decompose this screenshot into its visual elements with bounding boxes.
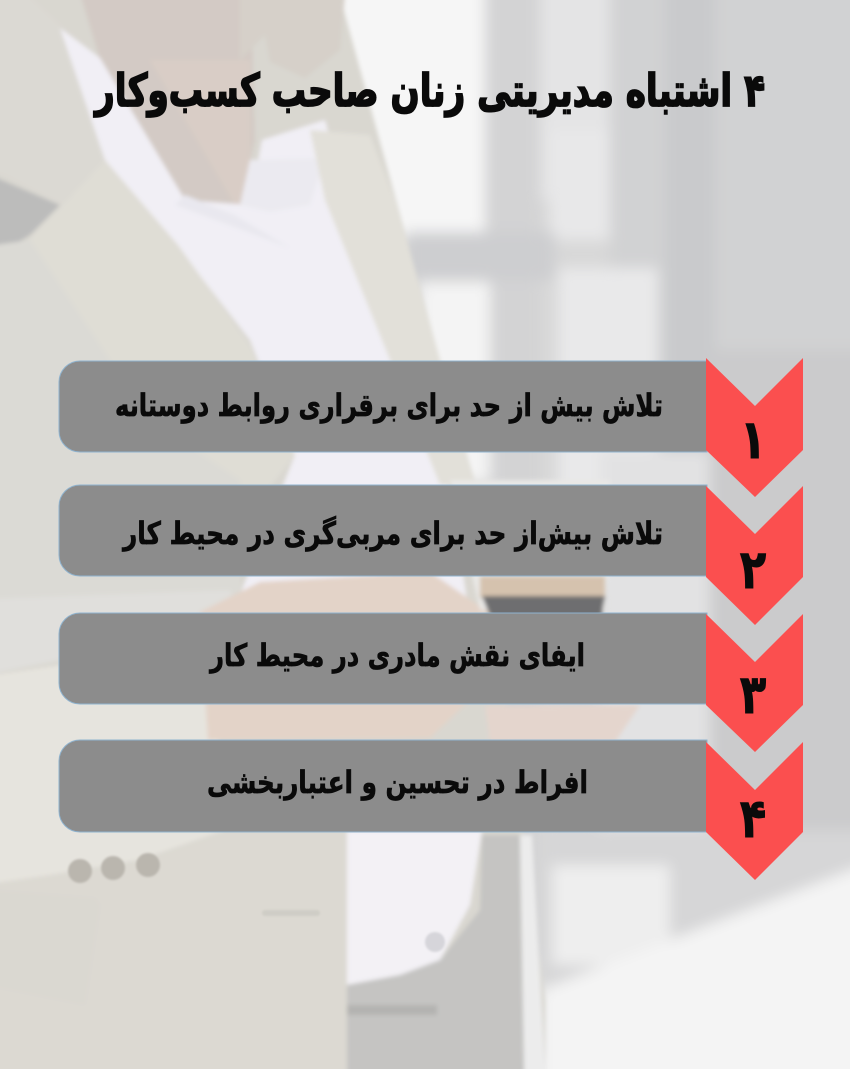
list item 2 <box>59 485 803 625</box>
item 3 number: ۳ <box>740 663 766 726</box>
item 4 text: افراط در تحسین و اعتباربخشی <box>207 765 588 801</box>
left lower body <box>0 240 240 680</box>
upper left lapel <box>0 0 105 205</box>
item 3 chevron <box>706 614 803 752</box>
lower body <box>0 830 347 1069</box>
item 4 chevron <box>706 742 803 880</box>
item 2 bar <box>59 485 707 576</box>
item 2 number: ۲ <box>740 538 766 601</box>
item 4 bar <box>59 740 707 832</box>
lower shirt <box>347 830 482 985</box>
item 4 number: ۴ <box>740 787 766 850</box>
shirt <box>60 28 470 620</box>
collar <box>175 195 290 248</box>
hair <box>240 0 348 78</box>
item 1 bar <box>59 361 707 452</box>
cuff <box>0 665 225 890</box>
item 2 chevron <box>706 486 803 625</box>
cup <box>450 480 610 610</box>
item 1 chevron <box>706 358 803 497</box>
hands <box>200 572 500 740</box>
item 3 text: ایفای نقش مادری در محیط کار <box>208 638 585 674</box>
item 3 bar <box>59 613 707 704</box>
trousers <box>347 835 525 1069</box>
item 1 number: ۱ <box>740 408 766 471</box>
list item 1 <box>59 358 803 497</box>
blazer buttons, slit and shirt button <box>68 853 445 952</box>
lapels <box>28 160 295 500</box>
blazer, shirt, cup and hands <box>0 0 640 1069</box>
item 2 text: تلاش بیش‌از حد برای مربی‌گری در محیط کار <box>121 515 663 552</box>
list item 3 <box>59 613 803 752</box>
list item 4 <box>59 740 803 880</box>
neck <box>70 0 255 205</box>
item 1 text: تلاش بیش از حد برای برقراری روابط دوستانه <box>115 388 663 424</box>
